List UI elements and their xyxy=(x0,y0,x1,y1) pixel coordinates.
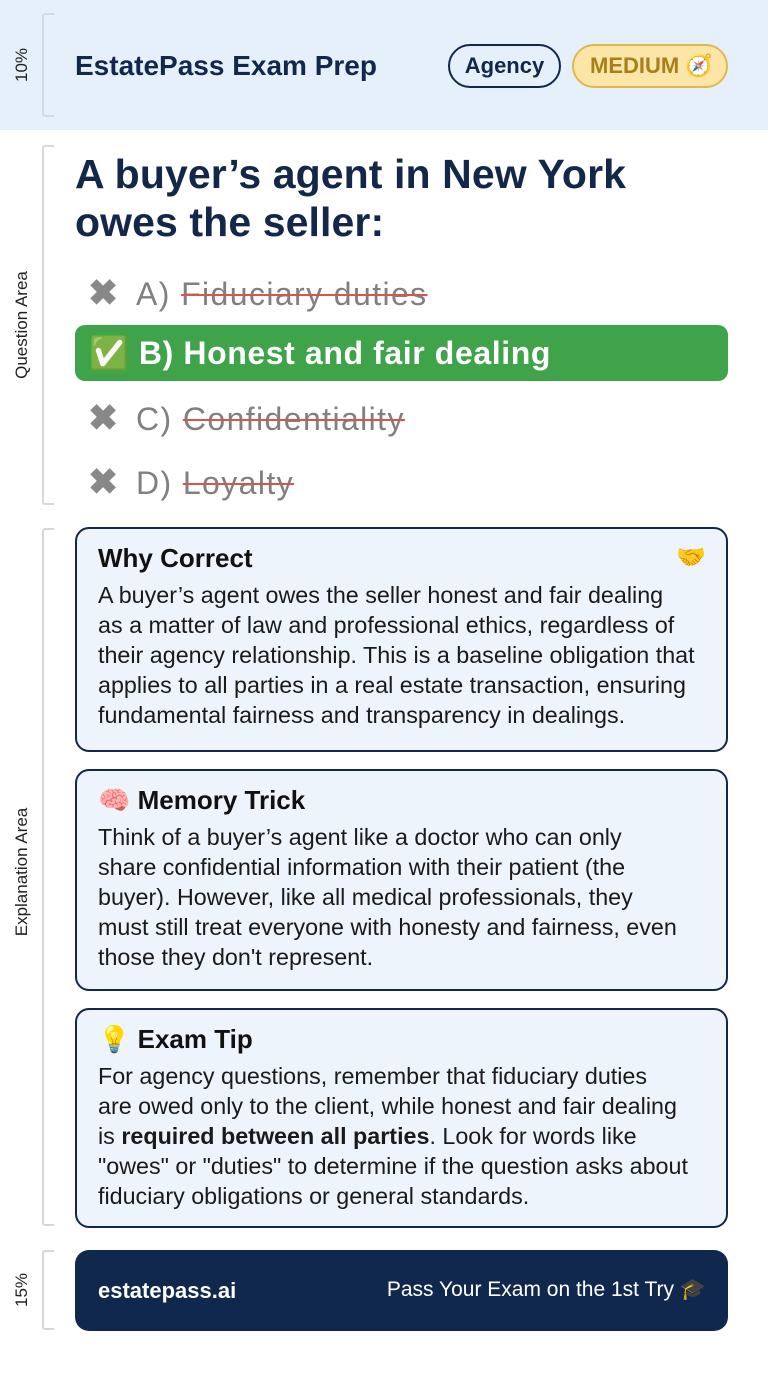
badge: Medium: MEDIUM 🧭 xyxy=(590,53,713,78)
card: memory trick: 🧠 Memory Trick xyxy=(98,785,305,815)
question title: A buyer’s agent in New York xyxy=(75,151,626,197)
card: why correct: A buyer’s agent owes the seller honest and fair dealing xyxy=(98,582,663,608)
card: memory trick: buyer). However, like all medical professionals, they xyxy=(98,884,633,910)
option B correct: ✅ B) Honest and fair dealing xyxy=(89,335,551,371)
badge: Agency: Agency xyxy=(465,53,544,78)
footer bar: estatepass.ai xyxy=(98,1278,236,1303)
card: why correct xyxy=(75,527,728,752)
card: exam tip: "owes" or "duties" to determine if the question asks about xyxy=(98,1153,688,1179)
header band xyxy=(0,0,768,130)
card: why correct: as a matter of law and professional ethics, regardless of xyxy=(98,612,674,638)
option C: ✖ xyxy=(88,397,120,438)
brand title: EstatePass Exam Prep xyxy=(75,50,377,81)
question title xyxy=(75,151,626,245)
option C: C) Confidentiality xyxy=(136,401,405,437)
badge: Agency xyxy=(448,44,561,88)
card: exam tip: 💡 Exam Tip xyxy=(98,1024,253,1054)
option D: ✖ xyxy=(88,461,120,502)
option A: ✖ xyxy=(88,272,120,313)
card: exam tip: For agency questions, remember that fiduciary duties xyxy=(98,1063,647,1089)
label: footer 15%: 15% xyxy=(12,1273,31,1307)
card: exam tip xyxy=(75,1008,728,1228)
card: why correct: applies to all parties in a real estate transaction, ensuring xyxy=(98,672,686,698)
card: why correct: their agency relationship. This is a baseline obligation that xyxy=(98,642,695,668)
label: question area: Question Area xyxy=(12,271,31,379)
option B correct xyxy=(75,325,728,381)
header label 10%: 10% xyxy=(12,48,31,82)
question title: owes the seller: xyxy=(75,199,384,245)
card: memory trick: must still treat everyone with honesty and fairness, even xyxy=(98,914,677,940)
option D: D) Loyalty xyxy=(136,465,294,501)
card: why correct: Why Correct xyxy=(98,543,253,573)
card: exam tip: fiduciary obligations or general standards. xyxy=(98,1183,529,1209)
card: why correct: fundamental fairness and transparency in dealings. xyxy=(98,702,625,728)
card: memory trick: share confidential information with their patient (the xyxy=(98,854,625,880)
card: why correct: 🤝 xyxy=(676,544,706,571)
label: explanation area: Explanation Area xyxy=(12,808,31,936)
badge: Medium xyxy=(572,44,728,88)
card: memory trick xyxy=(75,769,728,991)
card: memory trick: those they don't represent. xyxy=(98,944,373,970)
card: memory trick: Think of a buyer’s agent like a doctor who can only xyxy=(98,824,622,850)
option A: A) Fiduciary duties xyxy=(136,276,428,312)
card: exam tip: is required between all parties. Look for words like xyxy=(98,1123,637,1149)
card: exam tip: are owed only to the client, while honest and fair dealing xyxy=(98,1093,677,1119)
option D xyxy=(88,461,294,502)
footer bar: Pass Your Exam on the 1st Try 🎓 xyxy=(387,1278,706,1301)
footer bar xyxy=(75,1250,728,1331)
